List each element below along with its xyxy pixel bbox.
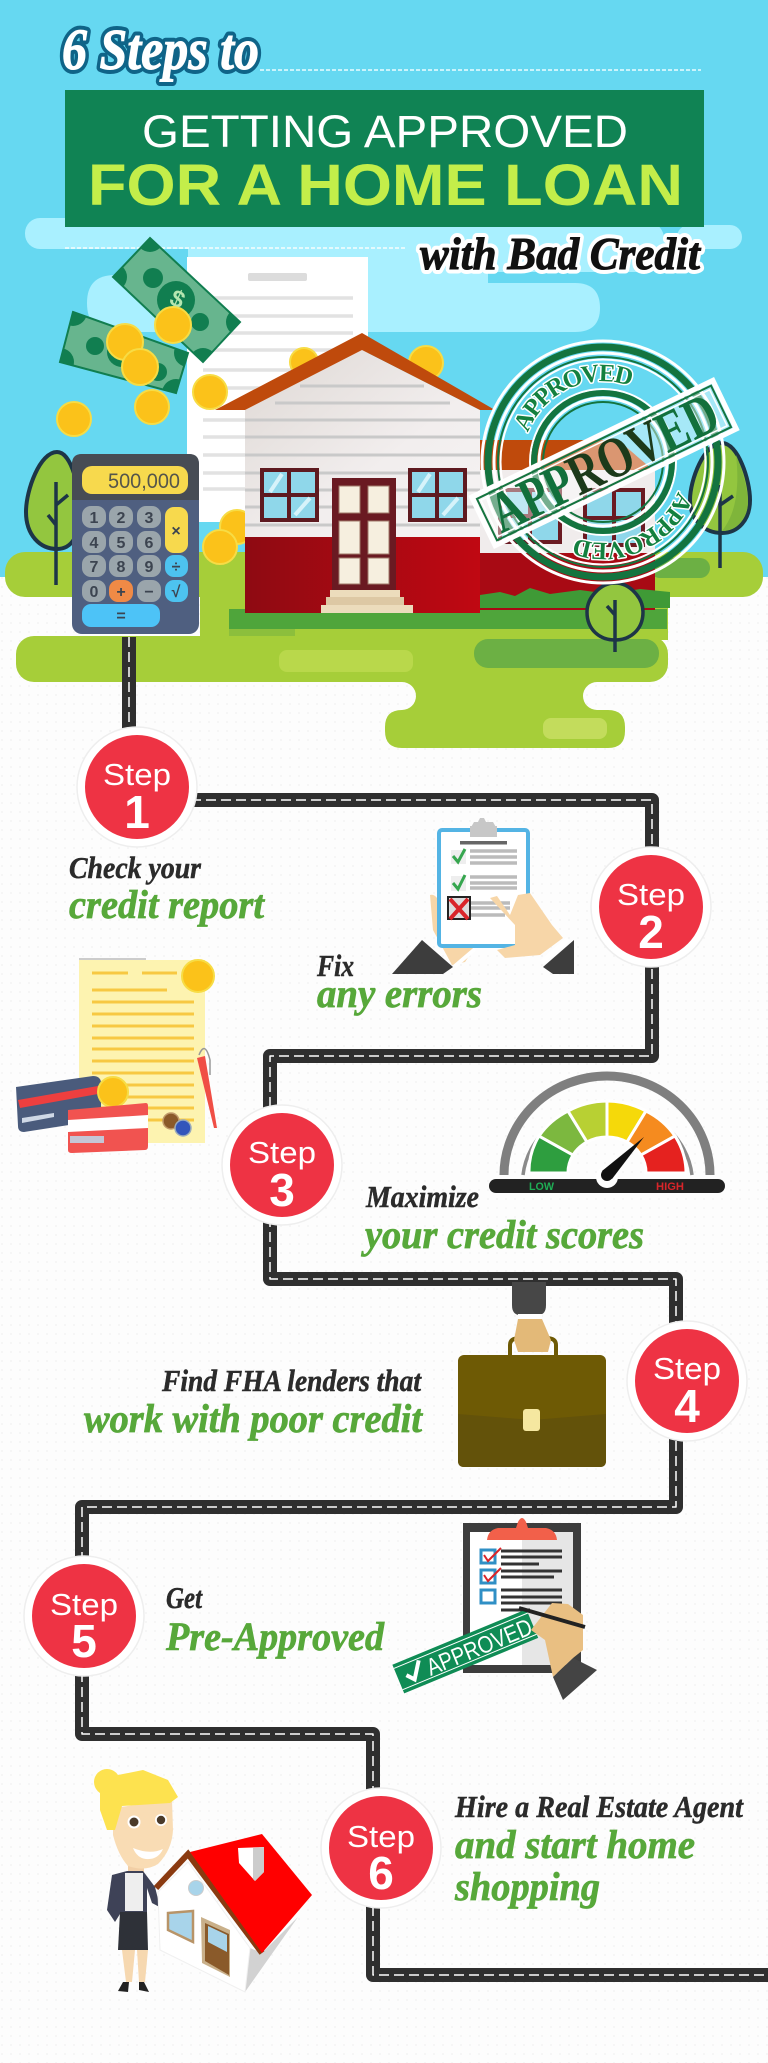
heading: 6 Steps to: 6 Steps to <box>62 17 259 82</box>
icon: clipboard with hands <box>392 818 574 974</box>
calculator: 3 <box>145 510 154 527</box>
step 4 badge: Step <box>653 1351 721 1386</box>
step 4 badge: 4 <box>674 1380 700 1432</box>
top dashed rule <box>260 69 701 71</box>
document behind house <box>187 257 368 522</box>
step 6 text <box>454 1789 744 1909</box>
step 6 badge <box>321 1788 441 1908</box>
step 5 text <box>165 1580 385 1659</box>
title banner <box>65 90 704 227</box>
road <box>82 637 768 1975</box>
tree centre <box>587 583 643 652</box>
calculator: 5 <box>117 535 126 552</box>
step 3 text: Maximize <box>365 1179 479 1214</box>
subheading: with Bad Credit: with Bad Credit <box>420 228 701 279</box>
step 2 text <box>316 948 482 1016</box>
title banner: FOR A HOME LOAN <box>88 153 683 218</box>
steps <box>321 590 413 613</box>
step 4 text: work with poor credit <box>84 1396 424 1441</box>
calculator: − <box>144 584 154 601</box>
icon: credit score gauge: LOW <box>529 1181 555 1193</box>
step 5 text: Get <box>166 1580 203 1615</box>
gabled wall <box>245 350 480 537</box>
calculator: 8 <box>117 559 126 576</box>
step 5 badge: Step <box>50 1587 118 1622</box>
ground <box>5 552 763 748</box>
calculator: 4 <box>90 535 99 552</box>
step 6 text: Hire a Real Estate Agent <box>454 1789 744 1824</box>
house <box>215 333 670 613</box>
step 4 badge <box>627 1321 747 1441</box>
calculator: × <box>171 523 181 540</box>
calculator: 500,000 <box>108 470 180 493</box>
step 6 text: and start home <box>455 1822 695 1867</box>
step 3 text: your credit scores <box>361 1212 644 1257</box>
step 1 badge: 1 <box>124 786 150 838</box>
step 6 text: shopping <box>454 1864 600 1909</box>
bill back <box>112 236 242 364</box>
step 1 text: credit report <box>69 882 266 927</box>
icon: clipboard with approved stamp: APPROVED <box>423 1614 536 1682</box>
tree left <box>26 452 80 585</box>
step 1 text <box>69 850 266 927</box>
step 6 badge: 6 <box>368 1847 394 1899</box>
calculator: 6 <box>145 535 154 552</box>
bill front <box>58 310 190 394</box>
calculator: 9 <box>145 559 154 576</box>
lower dashed rule <box>65 247 405 249</box>
step 3 badge: Step <box>248 1135 316 1170</box>
little house <box>156 1834 312 1992</box>
step 1 text: Check your <box>69 850 202 885</box>
grass <box>480 588 670 608</box>
tree right <box>690 443 750 568</box>
step 2 badge: 2 <box>638 906 664 958</box>
bills <box>58 236 242 394</box>
window left <box>262 470 317 520</box>
roof <box>215 333 495 410</box>
door <box>332 478 396 590</box>
calculator <box>72 454 199 634</box>
coins <box>57 307 191 436</box>
step 5 badge: 5 <box>71 1615 97 1667</box>
calculator: 1 <box>90 510 99 527</box>
approved stamp <box>468 340 740 584</box>
calculator: √ <box>172 584 181 601</box>
subheading: with Bad Credit: with Bad Credit <box>420 228 701 279</box>
step 4 text: Find FHA lenders that <box>161 1363 422 1398</box>
step 2 text: any errors <box>317 971 482 1016</box>
stamp ring text: APPROVED <box>514 363 634 434</box>
step 1 badge: Step <box>103 757 171 792</box>
step 2 text: Fix <box>316 948 354 983</box>
bill back: $ <box>165 284 190 315</box>
icon: credit score gauge: HIGH <box>656 1181 684 1193</box>
calculator: 0 <box>90 584 99 601</box>
step 3 badge <box>222 1105 342 1225</box>
siding lines <box>245 386 480 525</box>
coins behind house <box>193 346 443 564</box>
clouds <box>25 218 742 332</box>
ground patches <box>229 558 710 739</box>
icon: clipboard with approved stamp <box>392 1518 597 1700</box>
icon: briefcase with hand <box>458 1282 606 1467</box>
wing of house <box>480 440 655 610</box>
icon: credit score gauge <box>489 1076 725 1193</box>
step 3 badge: 3 <box>269 1164 295 1216</box>
agent <box>94 1769 182 1992</box>
step 2 badge: Step <box>617 877 685 912</box>
calculator: 2 <box>117 510 126 527</box>
step 5 badge <box>24 1556 144 1676</box>
calculator: = <box>116 608 126 625</box>
calculator: 7 <box>90 559 99 576</box>
calculator: ÷ <box>172 559 181 576</box>
step 4 text <box>84 1363 424 1441</box>
icon: credit report with cards <box>16 958 217 1153</box>
heading: 6 Steps to: 6 Steps to <box>62 17 259 82</box>
step 5 text: Pre-Approved <box>165 1614 385 1659</box>
stamp ring text lower: APPROVED <box>572 490 692 561</box>
window right <box>410 470 465 520</box>
icon: real estate agent with house <box>94 1769 312 1992</box>
step 1 badge <box>77 727 197 847</box>
step 3 text <box>361 1179 644 1257</box>
calculator: + <box>116 584 126 601</box>
stamp bar: APPROVED <box>479 380 729 545</box>
step 6 badge: Step <box>347 1819 415 1854</box>
step 2 badge <box>591 847 711 967</box>
sky <box>0 0 768 577</box>
title banner: GETTING APPROVED <box>142 106 628 157</box>
